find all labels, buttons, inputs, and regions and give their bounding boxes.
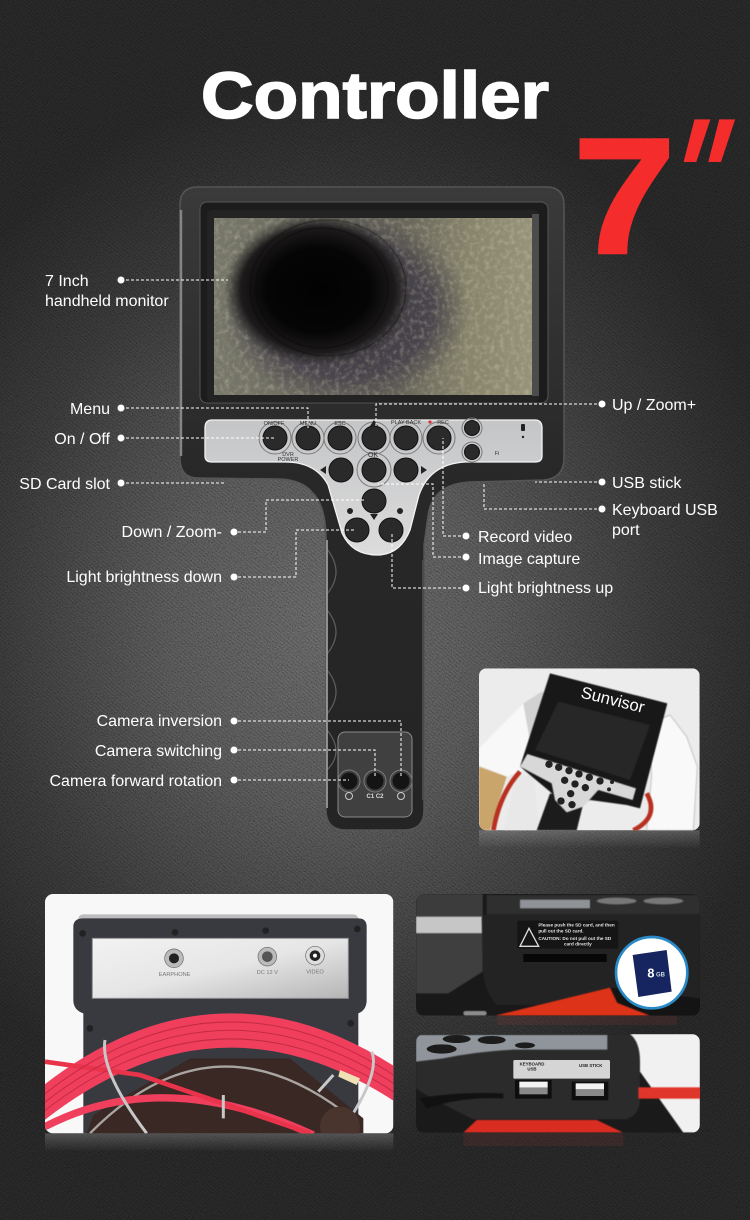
label: Light brightness up [392, 532, 613, 597]
label: 7 inch handheld monitor: 7 Inch [45, 273, 89, 290]
label: Keyboard USB port: port [612, 522, 640, 539]
label: Image capture [378, 484, 580, 568]
device body [180, 187, 564, 830]
label: Down / Zoom- [122, 500, 366, 541]
label: SD Card slot [19, 476, 225, 493]
panel arrows and markers [320, 420, 525, 520]
camera control plate [338, 732, 412, 817]
label: SD Card slot: SD Card slot [19, 476, 111, 493]
label: 7 inch handheld monitor: handheld monitor [45, 293, 169, 310]
label: USB stick: USB stick [612, 475, 682, 492]
label: Record video [443, 438, 572, 546]
photo: rear ports and cable reel [40, 894, 400, 1152]
panel labels: REC [437, 420, 449, 426]
label: Record video: Record video [478, 529, 572, 546]
screen bezel [200, 202, 548, 403]
panel labels: PLAY BACK [391, 420, 421, 426]
camera buttons: C1 C2 [366, 794, 384, 800]
controller device [180, 187, 564, 830]
photo: SD card slot: pull out the SD card. [538, 929, 584, 934]
label: Camera forward rotation: Camera forward rotation [49, 773, 222, 790]
photo: sunvisor: Sunvisor [579, 683, 647, 717]
label: Keyboard USB port [484, 482, 718, 539]
handle scallops [181, 210, 423, 808]
photo: rear ports and cable reel: EARPHONE [159, 972, 191, 978]
label: Camera forward rotation [49, 773, 349, 790]
camera buttons [338, 770, 412, 800]
label: Camera inversion: Camera inversion [97, 713, 222, 730]
label: Up / Zoom+: Up / Zoom+ [612, 397, 696, 414]
panel button rings [259, 418, 482, 487]
photo: SD card slot: GB [656, 973, 666, 979]
label: Menu: Menu [70, 401, 110, 418]
label: 7 inch handheld monitor [45, 273, 228, 310]
title: Controller [201, 58, 549, 132]
label: On / Off [54, 431, 276, 448]
photo: SD card slot [416, 894, 700, 1025]
label: USB stick [535, 475, 682, 492]
photo: USB ports: USB STICK [579, 1063, 603, 1068]
label: Camera inversion [97, 713, 401, 778]
panel labels: DVR [282, 452, 294, 458]
label: Up / Zoom+ [376, 397, 696, 428]
panel labels: ON/OFF [264, 421, 285, 427]
photo: SD card slot: card directly [564, 942, 592, 947]
label: Light brightness down [66, 530, 356, 586]
label: Light brightness up: Light brightness up [478, 580, 613, 597]
panel labels: OK [368, 452, 378, 459]
label: Menu [70, 401, 308, 428]
label: Light brightness down: Light brightness down [66, 569, 222, 586]
photo: rear ports and cable reel: VIDEO [306, 969, 324, 975]
control panel [205, 420, 542, 555]
label: On / Off: On / Off [54, 431, 111, 448]
label: Camera switching: Camera switching [95, 743, 222, 760]
photo: USB ports: USB [527, 1067, 537, 1072]
panel labels: MENU [300, 421, 316, 427]
panel buttons [263, 420, 480, 542]
photo: SD card slot: 8 [647, 967, 654, 981]
photo: sunvisor [479, 668, 700, 849]
size callout: 7 inch: 7 [573, 104, 676, 289]
screen: pipe interior image [214, 218, 532, 395]
photo: rear ports and cable reel: DC 12 V [257, 970, 278, 976]
photo: USB ports [416, 1034, 702, 1146]
panel labels [264, 420, 499, 463]
label: Image capture: Image capture [478, 551, 580, 568]
label: Down / Zoom-: Down / Zoom- [122, 524, 222, 541]
photo: USB ports: KEYBOARD [520, 1061, 544, 1066]
photo: SD card slot: Please push the SD card, and then [538, 923, 615, 928]
label: Camera switching [95, 743, 375, 778]
photo: SD card slot: CAUTION: Do not pull out the SD [538, 936, 612, 941]
panel labels: ESC [334, 421, 346, 427]
label: Keyboard USB port: Keyboard USB [612, 502, 718, 519]
size callout: 7 inch: " [653, 84, 741, 274]
panel labels: Fi [495, 451, 499, 457]
panel labels: POWER [278, 457, 298, 463]
size callout: 7 inch [573, 84, 741, 289]
